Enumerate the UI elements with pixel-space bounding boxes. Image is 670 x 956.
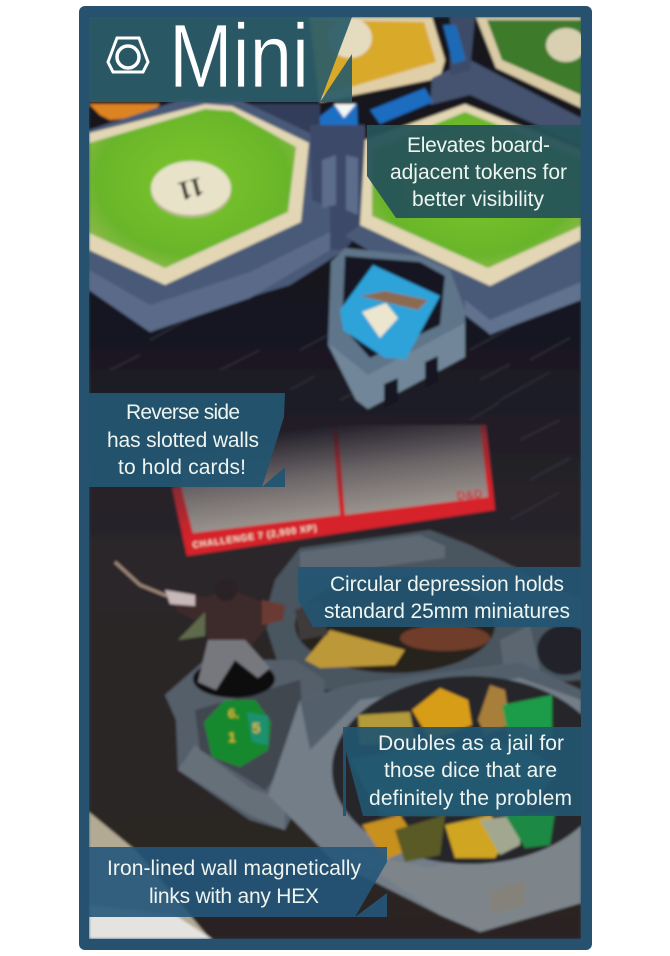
- callout: reverse side: to hold cards!: [118, 456, 246, 479]
- callout: iron-lined wall: Iron-lined wall magnetically: [107, 857, 362, 880]
- gray frame right hex: [345, 225, 581, 335]
- red stat card: [172, 425, 495, 556]
- D&D logo: D&D: [456, 486, 484, 503]
- gray frame left hex: [89, 102, 343, 306]
- miniature figure: [115, 562, 285, 690]
- callout: reverse side: [89, 393, 285, 487]
- right hex grass: [372, 112, 581, 268]
- callout: dice jail: those dice that are: [384, 759, 557, 782]
- photo: board game hexes and miniatures: [89, 17, 608, 939]
- callout: dice jail: definitely the problem: [369, 787, 572, 810]
- dark band: [250, 102, 322, 134]
- blue shield token: [340, 265, 440, 359]
- blue roads: [443, 25, 466, 64]
- photo: board game hexes and miniatures: 6.: [228, 706, 239, 721]
- callout: iron-lined wall: [89, 847, 387, 917]
- callout: dice jail: Doubles as a jail for: [378, 732, 564, 755]
- upper dark region: [89, 17, 581, 117]
- left hex grass: [89, 109, 296, 268]
- small hex tray: [165, 660, 325, 830]
- icon: hexagon ring logo: [108, 38, 148, 72]
- jail hex tray: [268, 677, 581, 916]
- top yellow hex: [310, 17, 445, 102]
- callout: elevates tokens: [367, 125, 581, 218]
- jail interior: [332, 676, 608, 864]
- callout: iron-lined wall: links with any HEX: [149, 885, 319, 908]
- coins in tray: [305, 630, 405, 668]
- photo: board game hexes and miniatures: 11: [175, 171, 207, 207]
- left hex tile: [89, 104, 309, 285]
- callout: circular depression: [298, 567, 581, 627]
- right hex tile: [360, 104, 581, 286]
- callout: reverse side: has slotted walls: [107, 429, 259, 452]
- card label: CHALLENGE 7 (2,900 XP): [192, 523, 317, 550]
- gray connector strips: [429, 60, 581, 125]
- callout: reverse side: Reverse side: [126, 401, 240, 424]
- frame: dark blue rounded border: [79, 6, 592, 950]
- callout: circular depression: standard 25mm miniatures: [324, 600, 570, 623]
- callout: elevates tokens: adjacent tokens for: [390, 161, 567, 184]
- callout: elevates tokens: better visibility: [412, 188, 544, 211]
- photo: board game hexes and miniatures: 5: [252, 720, 260, 737]
- dice: [350, 685, 560, 862]
- table background: [89, 115, 581, 939]
- middle hex tray: [264, 530, 581, 690]
- sand stripes corner: [89, 812, 210, 939]
- blue settlement: [318, 102, 360, 127]
- top green hex: [476, 17, 581, 108]
- gray channel between hexes: [310, 125, 365, 250]
- orange road: [89, 104, 160, 120]
- title banner: [89, 7, 352, 107]
- callout: elevates tokens: Elevates board-: [407, 134, 550, 157]
- token holder: [326, 246, 467, 384]
- number token 11: [150, 192, 232, 220]
- photo: board game hexes and miniatures: 1: [228, 729, 236, 745]
- callout: dice jail: [343, 727, 581, 816]
- table grain: [110, 318, 570, 520]
- card inner panels: [180, 425, 340, 533]
- right edge tray: [536, 627, 581, 676]
- callout: circular depression: Circular depression holds: [330, 573, 564, 596]
- title text: Mini: [169, 7, 309, 107]
- miniature base: [193, 660, 275, 698]
- green die: [204, 700, 271, 767]
